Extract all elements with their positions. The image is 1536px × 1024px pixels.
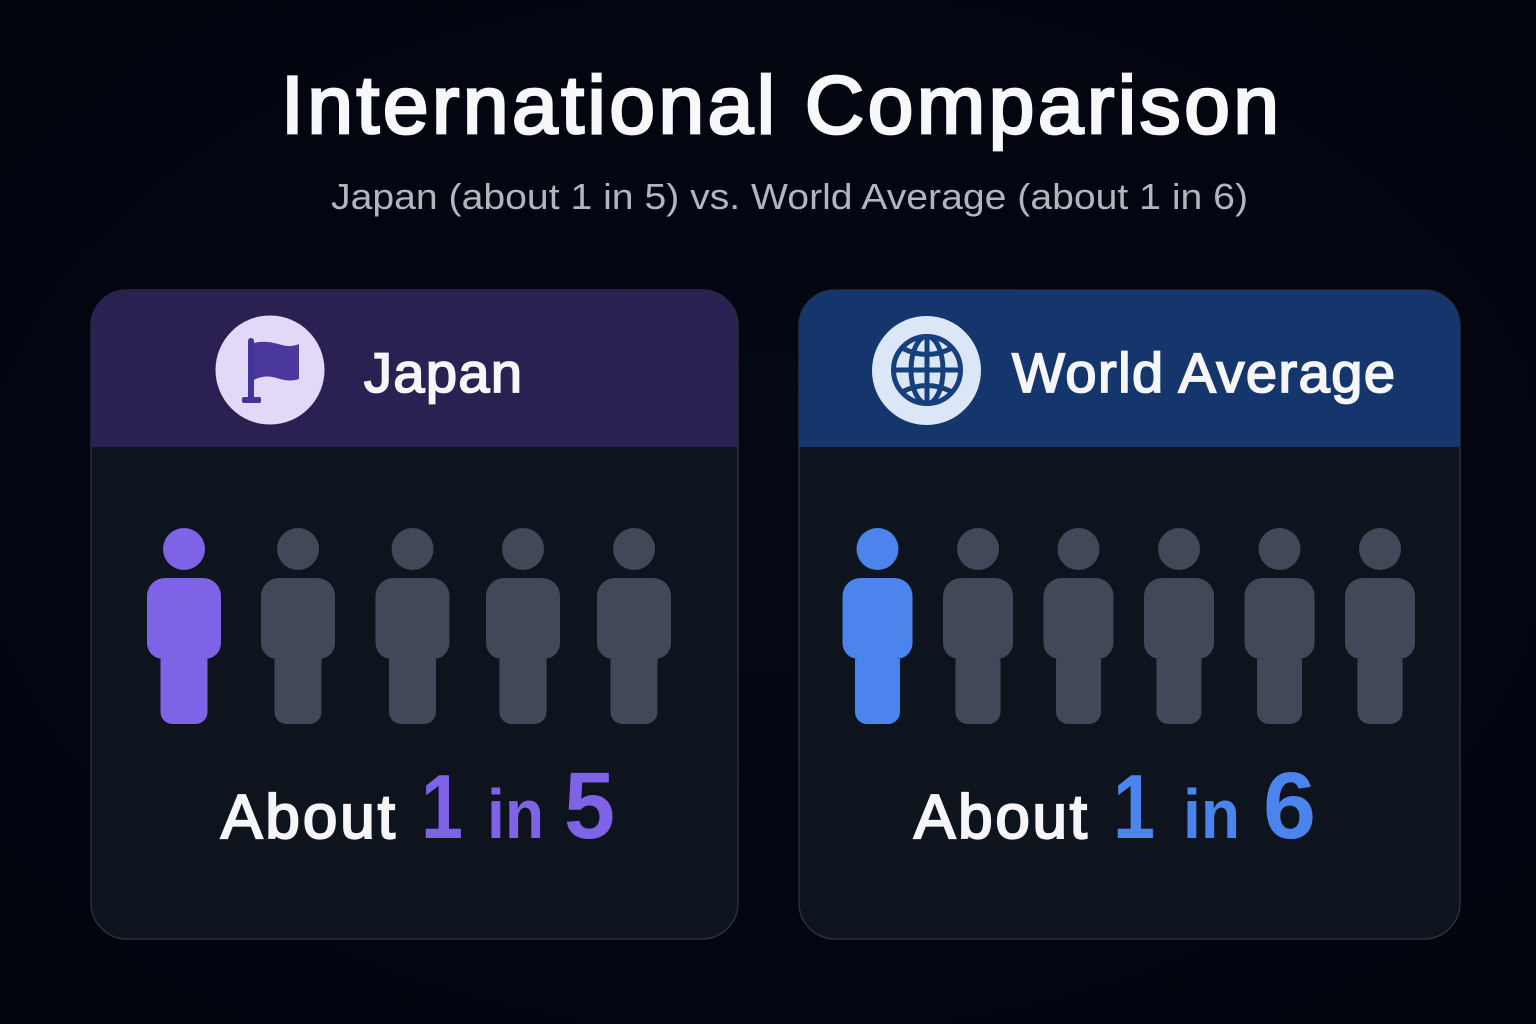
stat: About 1 in 6: in [1183,775,1240,853]
person highlighted [147,528,221,724]
person highlighted [842,528,912,724]
card body: Japan [91,290,738,939]
panel: World Average [799,290,1460,939]
panel: Japan [91,290,738,939]
stat: About 1 in 6: About [914,783,1087,852]
card body: World Average [799,290,1460,939]
stat: About 1 in 6: 1 [1113,757,1155,858]
person grey 2 [943,528,1013,724]
person grey 6 [1345,528,1415,724]
header band: Japan [91,290,738,447]
heading: World Average: World Average [1012,341,1395,404]
person grey 3 [1044,528,1114,724]
pictogram: 1 in 6 people [842,528,1415,724]
person grey 3 [376,528,450,724]
pictogram: 1 in 5 people [147,528,671,724]
stat: About 1 in 6 [914,753,1316,859]
person grey 2 [261,528,335,724]
icon: globe [872,316,981,425]
person grey 4 [486,528,560,724]
stat: About 1 in 5 [221,753,615,859]
icon: flag [216,316,324,424]
title: International Comparison [281,60,1279,151]
header band: World Average [799,290,1460,447]
stat: About 1 in 5: About [221,783,395,852]
person grey 4 [1144,528,1214,724]
subtitle: Japan (about 1 in 5) vs. World Average (about 1 in 6) [331,176,1248,217]
heading: Japan: Japan [364,341,522,404]
stat: About 1 in 5: in [487,775,544,853]
stat: About 1 in 5: 1 [421,757,463,858]
stat: About 1 in 5: 5 [564,753,615,859]
person grey 5 [597,528,671,724]
person grey 5 [1244,528,1314,724]
stat: About 1 in 6: 6 [1263,753,1316,859]
